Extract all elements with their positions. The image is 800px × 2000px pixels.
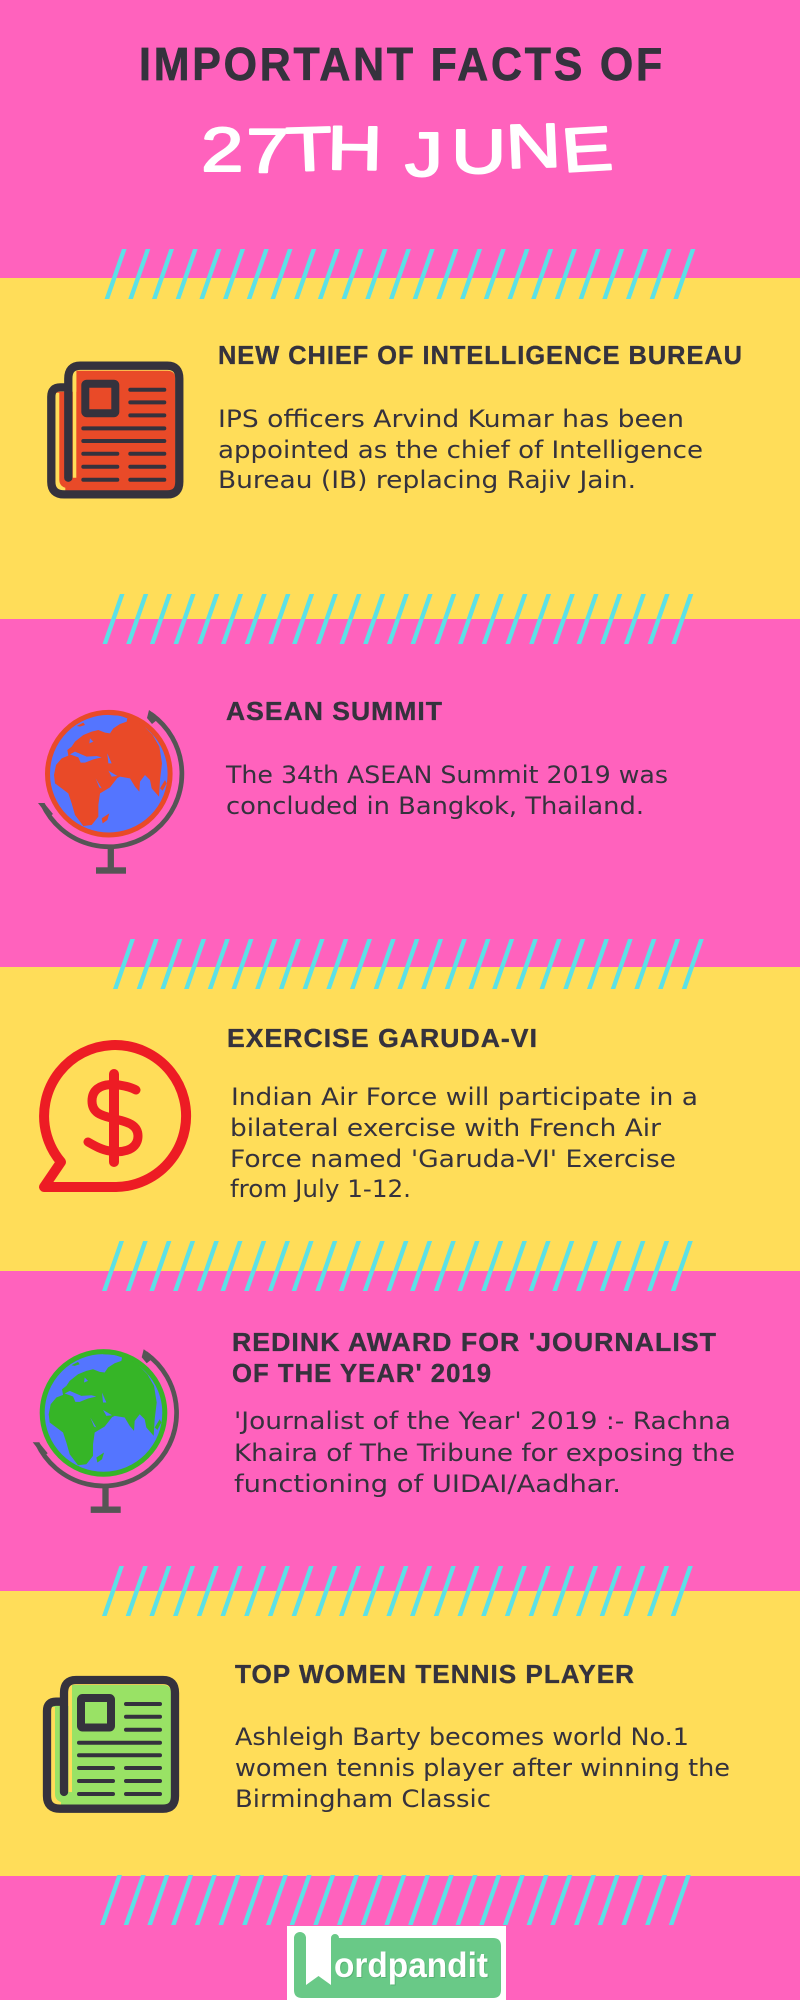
heading: REDINK AWARD FOR 'JOURNALIST: [232, 1329, 717, 1357]
heading: [232, 1329, 717, 1388]
date heading: 27TH JUNE: [201, 110, 615, 189]
heading: NEW CHIEF OF INTELLIGENCE BUREAU: [218, 342, 743, 370]
heading: ASEAN SUMMIT: [226, 698, 443, 726]
logo: wordpandit: ordpandit: [334, 1946, 488, 1985]
stripe divider 6: [100, 1875, 691, 1925]
panel: asean summit: [38, 698, 668, 874]
body text: [225, 761, 668, 820]
icon: globe with green land: [33, 1346, 177, 1513]
body text: [234, 1407, 735, 1498]
band: footer pink background: [0, 1876, 800, 2000]
icon: globe with red land: [38, 707, 182, 874]
band: header pink background: [0, 0, 800, 278]
heading: EXERCISE GARUDA-VI: [227, 1025, 538, 1053]
stripe divider 4: [102, 1241, 693, 1291]
panel: redink award: [33, 1329, 735, 1513]
body text: [230, 1083, 698, 1203]
icon: red newspaper: [51, 366, 179, 494]
body text: Khaira of The Tribune for exposing the: [234, 1439, 735, 1467]
body text: Indian Air Force will participate in a: [231, 1083, 698, 1111]
body text: concluded in Bangkok, Thailand.: [226, 792, 644, 820]
body text: from July 1-12.: [230, 1175, 411, 1203]
body text: 'Journalist of the Year' 2019 :- Rachna: [234, 1407, 731, 1435]
panel: intelligence bureau: [51, 342, 743, 494]
body text: Bureau (IB) replacing Rajiv Jain.: [218, 466, 636, 494]
band: section 2 pink background: [0, 619, 800, 967]
body text: The 34th ASEAN Summit 2019 was: [225, 761, 668, 789]
heading: TOP WOMEN TENNIS PLAYER: [235, 1661, 635, 1689]
body text: women tennis player after winning the: [235, 1754, 730, 1782]
body text: [235, 1723, 730, 1813]
stripe divider 2: [102, 594, 693, 644]
body text: Birmingham Classic: [235, 1785, 491, 1813]
body text: Force named 'Garuda-VI' Exercise: [230, 1145, 676, 1173]
body text: appointed as the chief of Intelligence: [218, 436, 703, 464]
heading: OF THE YEAR' 2019: [232, 1360, 492, 1388]
band: section 1 yellow background: [0, 278, 800, 619]
icon: dollar speech bubble: [44, 1045, 186, 1187]
band: section 4 pink background: [0, 1271, 800, 1591]
logo: wordpandit: [287, 1926, 506, 2000]
stripe divider 1: [105, 249, 695, 299]
body text: [218, 405, 703, 494]
panel: exercise garuda: [44, 1025, 698, 1203]
body text: Ashleigh Barty becomes world No.1: [235, 1723, 689, 1751]
title: [139, 38, 665, 189]
body text: IPS officers Arvind Kumar has been: [218, 405, 684, 433]
body text: bilateral exercise with French Air: [230, 1114, 661, 1142]
title: IMPORTANT FACTS OF: [139, 38, 665, 90]
icon: green newspaper: [47, 1680, 175, 1809]
stripe divider 5: [102, 1566, 693, 1616]
body text: functioning of UIDAI/Aadhar.: [234, 1470, 621, 1498]
band: section 3 yellow background: [0, 967, 800, 1271]
panel: top women tennis player: [47, 1661, 730, 1813]
band: section 5 yellow background: [0, 1591, 800, 1876]
stripe divider 3: [113, 939, 704, 989]
